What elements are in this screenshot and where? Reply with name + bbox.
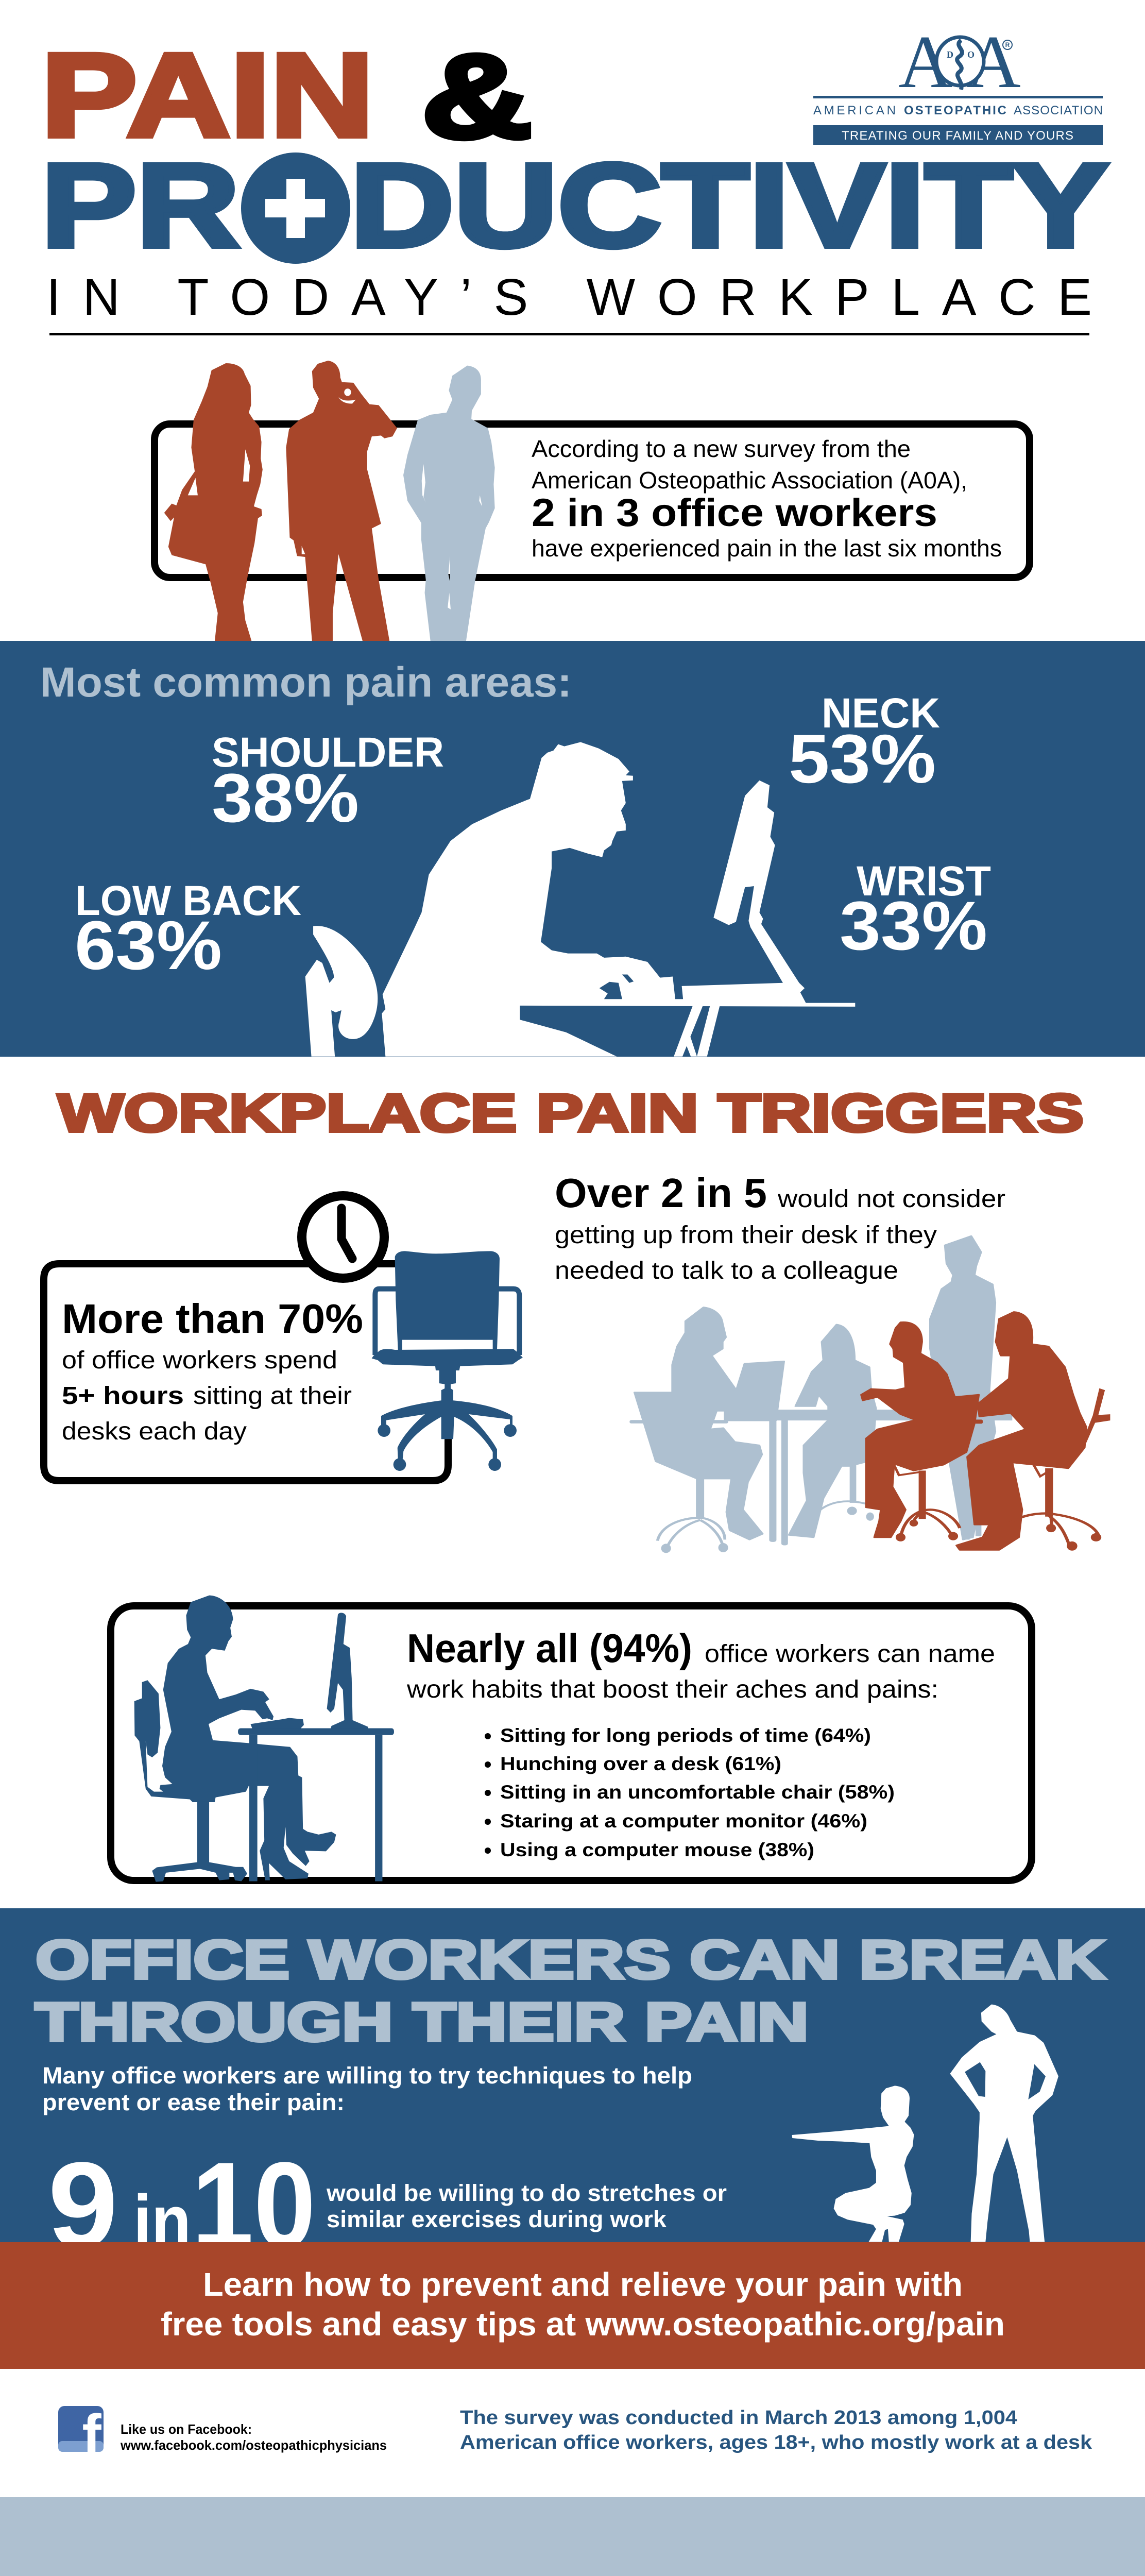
panel: most common pain areas	[0, 641, 1145, 1057]
stat description	[326, 2180, 727, 2232]
title word: PAIN: PAIN	[41, 29, 374, 161]
seated woman with laptop	[635, 1307, 784, 1553]
list of habits: Sitting in an uncomfortable chair (58%)	[500, 1782, 895, 1803]
seated man 1	[861, 1322, 983, 1541]
facebook text: Like us on Facebook:	[121, 2421, 252, 2437]
text block: getting up from their desk if they	[555, 1222, 937, 1249]
icon: Facebook: f	[82, 2403, 101, 2467]
callout text: sitting at their	[193, 1382, 352, 1410]
intro text: Many office workers are willing to try techniques to help	[42, 2062, 692, 2089]
logo tagline band	[813, 125, 1103, 145]
list of habits: Using a computer mouse (38%)	[500, 1839, 814, 1860]
icon: Facebook	[58, 2403, 104, 2467]
text block	[555, 1170, 1005, 1284]
callout text: According to a new survey from the	[532, 435, 911, 462]
logo emblem: A	[898, 20, 953, 104]
banner: call to action: free tools and easy tips at www.osteopathic.org/pain	[161, 2306, 1005, 2343]
stat description: similar exercises during work	[327, 2206, 667, 2232]
list of habits: Sitting for long periods of time (64%)	[500, 1725, 871, 1746]
standing colleague	[930, 1236, 995, 1539]
stat: wrist: WRIST	[857, 858, 991, 905]
stat: neck	[789, 690, 940, 798]
callout text	[62, 1296, 363, 1445]
logo emblem: A	[966, 20, 1021, 104]
stat: wrist	[840, 858, 991, 964]
panel: office workers can break through	[0, 1908, 1145, 2273]
callout box	[44, 1264, 448, 1481]
text block: needed to talk to a colleague	[555, 1257, 898, 1284]
panel: more than 70% sitting	[44, 1196, 523, 1481]
stat: neck: NECK	[822, 690, 940, 737]
panel heading	[35, 1929, 1105, 2053]
text block: would not consider	[777, 1185, 1005, 1213]
silhouettes: meeting around a table	[629, 1236, 1110, 1553]
icon: office chair	[372, 1251, 523, 1471]
survey note: The survey was conducted in March 2013 among 1,004	[460, 2407, 1017, 2429]
logo emblem: O	[967, 49, 975, 60]
text block	[406, 1625, 995, 1703]
seated woman in centre	[789, 1325, 876, 1537]
seated man 2	[956, 1312, 1110, 1551]
footer band	[0, 2497, 1145, 2576]
stat: 9 in 10: in	[133, 2180, 191, 2263]
title ampersand: &	[421, 30, 533, 163]
icon: clock	[302, 1196, 384, 1278]
silhouette: woman at desk	[134, 1596, 394, 1882]
silhouettes: three office workers	[164, 361, 495, 641]
facebook text: www.facebook.com/osteopathicphysicians	[120, 2437, 387, 2453]
subtitle: IN TODAY’S WORKPLACE	[46, 268, 1092, 326]
stat: 9 in 10	[48, 2137, 316, 2273]
survey note: American office workers, ages 18+, who mostly work at a desk	[460, 2432, 1092, 2453]
silhouettes: people exercising	[792, 2005, 1058, 2242]
facebook text	[120, 2421, 387, 2453]
text block: Nearly all (94%)	[407, 1625, 692, 1671]
panel: nearly all work habits	[111, 1596, 1032, 1882]
stat: shoulder: SHOULDER	[212, 729, 444, 776]
panel heading: THROUGH THEIR PAIN	[35, 1992, 809, 2053]
text block: office workers can name	[705, 1640, 995, 1668]
intro text	[42, 2062, 692, 2115]
stat: low back	[75, 877, 301, 984]
callout text: 2 in 3 office workers	[532, 491, 937, 535]
heading: workplace pain triggers: WORKPLACE PAIN TRIGGERS	[58, 1083, 1084, 1143]
list of habits	[485, 1725, 895, 1860]
callout text: More than 70%	[62, 1296, 363, 1342]
callout box	[155, 424, 1030, 578]
logo emblem: D	[947, 49, 953, 60]
logo name: ASSOCIATION	[1014, 104, 1103, 117]
callout text: 5+ hours	[62, 1382, 184, 1410]
stat: 9 in 10: 9	[48, 2137, 118, 2273]
panel heading: Most common pain areas:	[40, 659, 572, 706]
text block: work habits that boost their aches and pains:	[406, 1676, 938, 1703]
callout text: of office workers spend	[62, 1347, 337, 1374]
logo name: OSTEOPATHIC	[904, 104, 1006, 117]
stat: 9 in 10: 10	[192, 2137, 316, 2273]
logo emblem	[898, 20, 1021, 104]
callout text	[532, 435, 1002, 562]
callout text: desks each day	[62, 1418, 247, 1445]
stat description: would be willing to do stretches or	[326, 2180, 727, 2206]
meeting table	[629, 1410, 1012, 1546]
stat: wrist: 33%	[840, 888, 987, 964]
callout text: American Osteopathic Association (A0A),	[532, 467, 967, 494]
panel: survey intro	[155, 361, 1030, 641]
logo name	[813, 104, 1103, 117]
title word: PR: PR	[41, 139, 240, 272]
title letter O with medical cross: O	[250, 139, 341, 272]
text block: Over 2 in 5	[555, 1170, 767, 1216]
stat: low back: LOW BACK	[75, 877, 301, 924]
banner: call to action	[0, 2242, 1145, 2369]
logo: American Osteopathic Association	[813, 20, 1103, 145]
list of habits: Staring at a computer monitor (46%)	[500, 1810, 867, 1832]
title word: DUCTIVITY: DUCTIVITY	[350, 139, 1108, 272]
logo tagline band: TREATING OUR FAMILY AND YOURS	[842, 129, 1073, 143]
title	[41, 29, 1108, 326]
survey note	[460, 2407, 1092, 2453]
intro text: prevent or ease their pain:	[42, 2089, 345, 2115]
callout box	[111, 1606, 1032, 1880]
stat: shoulder	[212, 729, 444, 837]
stat: shoulder: 38%	[212, 760, 359, 837]
panel: over 2 in 5	[555, 1170, 1110, 1553]
logo emblem: R	[1005, 41, 1010, 48]
callout text: have experienced pain in the last six months	[532, 535, 1002, 562]
stat: neck: 53%	[789, 721, 936, 798]
logo name: AMERICAN	[813, 104, 896, 117]
list of habits: Hunching over a desk (61%)	[500, 1753, 781, 1774]
stat: low back: 63%	[75, 907, 222, 984]
banner: call to action: Learn how to prevent and relieve your pain with	[203, 2266, 963, 2303]
silhouette: man hunched at computer	[305, 742, 855, 1057]
panel heading: OFFICE WORKERS CAN BREAK	[36, 1929, 1105, 1990]
